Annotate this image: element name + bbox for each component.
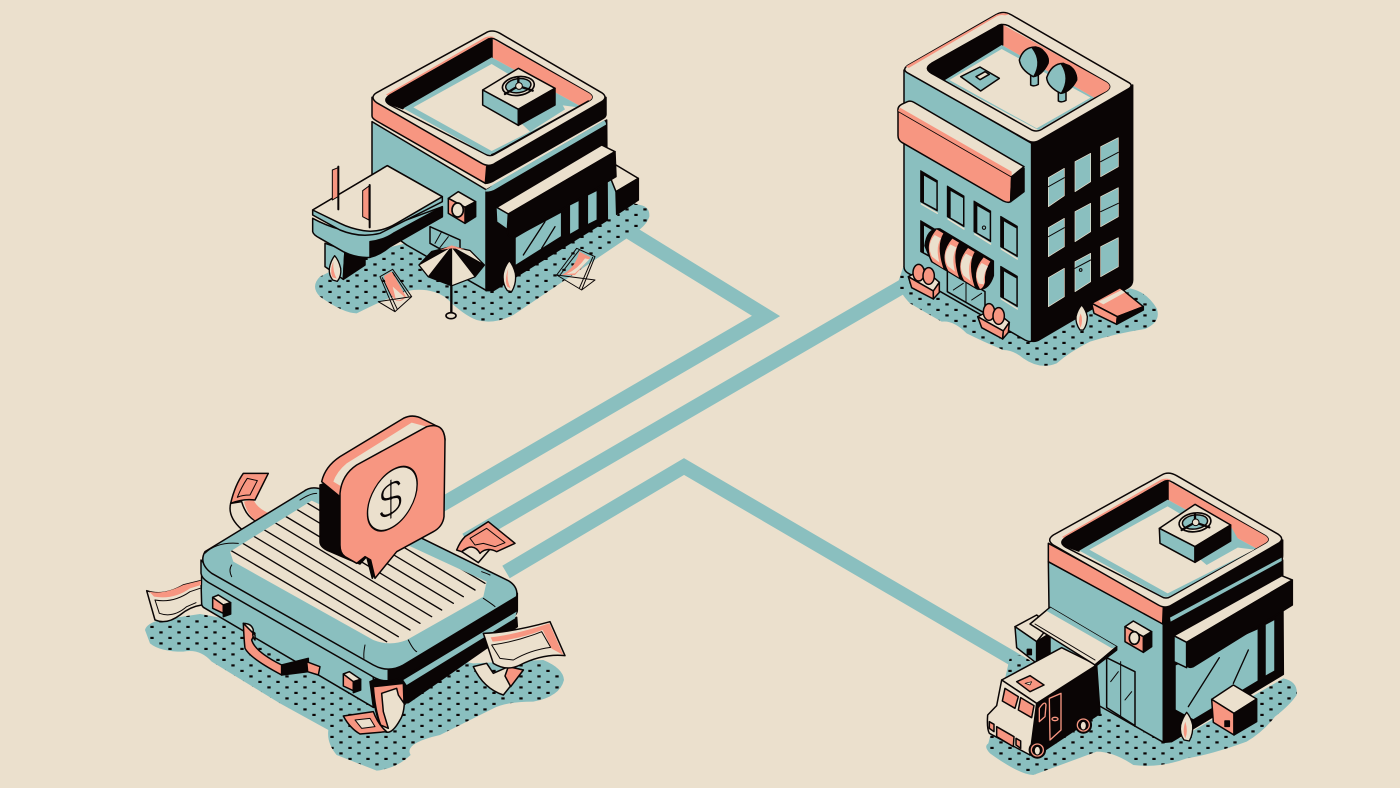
roof vent one [1019,47,1048,86]
tree [1180,712,1193,741]
connection roads [436,231,1022,664]
roof fan unit [1159,504,1231,562]
suitcase lower body left [201,573,373,707]
umbrella [419,245,484,319]
flag two [363,185,370,227]
window ledge marks [1048,152,1118,271]
van door outlines [1039,693,1061,740]
small windows [569,190,597,235]
left wall [372,122,487,291]
teal roof strip [1170,558,1282,622]
bill: rear lower right [473,663,523,695]
entrance door [430,227,460,260]
suitcase lower body right [370,617,517,707]
right wall [1032,85,1133,341]
tree left [329,256,341,281]
van front [987,680,1037,755]
shop sign [1174,576,1292,668]
right wall [1163,560,1283,742]
lid side left [201,560,388,681]
building: restaurant [313,31,649,322]
van windscreen left [1002,688,1018,708]
awning pillar [325,243,365,279]
ground shadow [315,193,649,322]
van windscreen right [1018,698,1034,718]
bill: right [483,622,565,668]
road: warehouse to suitcase [506,466,1022,664]
van roof [1002,648,1097,703]
flag one [332,167,338,209]
left wall [1048,562,1163,742]
van roof hatch [1017,676,1044,692]
building: office tower [898,12,1158,366]
latch left [213,595,231,617]
right windows [1048,138,1118,307]
ground shadow [986,655,1297,775]
wall emblem [448,192,476,223]
dollar sign: $ [379,464,403,534]
large glass window [1175,628,1258,720]
awning [313,166,442,257]
entrance door [1107,658,1135,726]
right wall [486,120,607,291]
left wall [904,70,1032,341]
entrance door [947,268,985,313]
latch right [343,672,361,693]
roof front faces [1048,540,1283,624]
van wheel rear [1075,717,1091,733]
wall emblem [1125,621,1152,652]
tree right [503,261,516,292]
bill: bottom [343,683,404,734]
window lock [982,226,986,229]
roof salmon lip [386,36,495,96]
planter right [978,304,1009,339]
bill: left [147,581,202,622]
shop sign [497,145,616,238]
tree [1076,305,1087,330]
price bubble side [320,477,380,578]
back box [1015,615,1050,663]
deck chair left [378,269,412,312]
lid top [203,488,517,669]
lid side right [388,593,517,681]
road: restaurant to suitcase [436,231,766,508]
ramp [1092,288,1143,324]
ground shadow [898,267,1158,366]
roof salmon lip [1062,479,1171,538]
lid corrugated panel [230,488,487,643]
small side window [1265,619,1275,677]
ground shadow [145,614,564,771]
planter left [908,264,939,299]
teal strip under roof [485,121,606,192]
loading canopy [1030,607,1117,667]
roof vent two [1047,63,1077,102]
roof hatch [961,67,999,91]
roof well [386,38,592,156]
roof well [1062,481,1268,598]
van cargo side [1030,665,1100,755]
roof top [373,31,605,165]
building: warehouse [986,473,1297,775]
window sills [921,204,1017,309]
roof fan unit [483,68,555,125]
lid corner seams [205,493,495,658]
bill: rear right [457,522,515,563]
store window [515,212,562,266]
striped awning [925,229,993,289]
roof salmon lip [906,13,1009,68]
suitcase with money [145,416,565,771]
roof front faces [372,97,606,183]
roof top [1050,473,1282,607]
roof well [927,25,1110,131]
road: office to suitcase [466,281,912,540]
signboard [898,101,1024,202]
van wheel front [1029,742,1045,758]
left window glass [924,176,1016,305]
roof top [905,12,1131,142]
dollar coin [368,456,417,542]
side annex box [607,165,638,217]
teal seam strip [403,612,517,685]
left window frames [921,171,1017,307]
bill: rear left [230,473,271,529]
van grille [989,722,1021,748]
price bubble top [322,416,445,497]
price bubble front [340,426,445,578]
price bubble highlight [333,423,427,487]
deck chair right [557,248,595,290]
cardboard box [1212,685,1257,735]
suitcase handle [243,623,320,675]
